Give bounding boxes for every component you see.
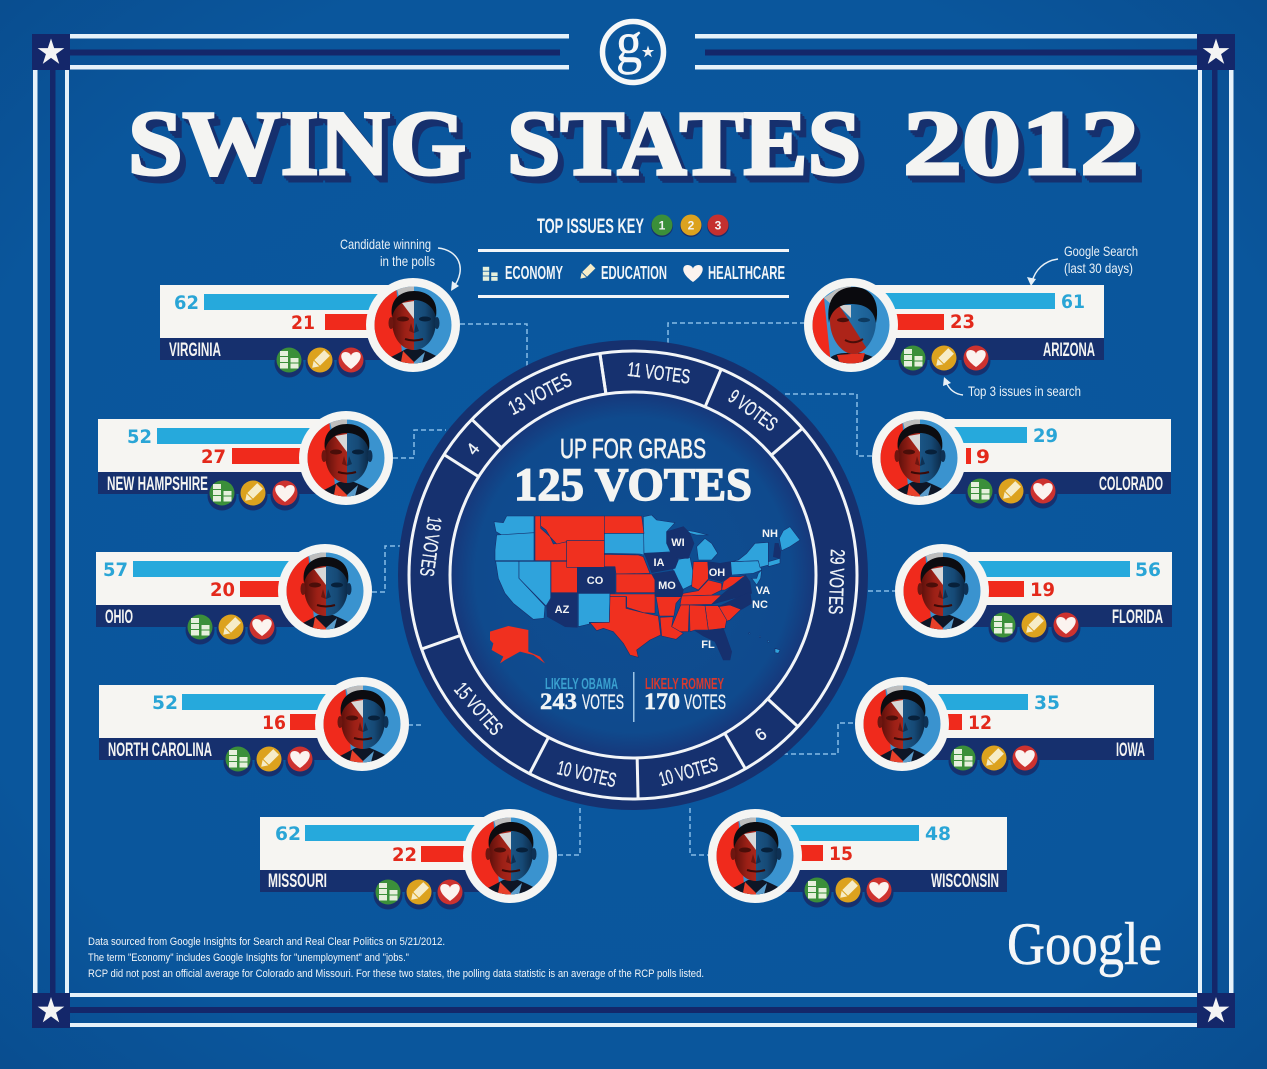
panel: North Carolina — [99, 677, 409, 776]
panel: Arizona — [804, 278, 1104, 376]
issue icons — [186, 614, 276, 644]
poll number: 19 — [1030, 579, 1055, 601]
title: STATES — [507, 92, 861, 194]
annotation: top 3 issues in search: Top 3 issues in search — [968, 383, 1081, 399]
key rank 3 — [707, 214, 729, 237]
segment Wisconsin 10 votes: 10 VOTES — [657, 754, 720, 791]
segment North Carolina 15 votes: 15 VOTES — [449, 679, 507, 740]
state name: IOWA — [1116, 740, 1145, 761]
poll number: 27 — [201, 446, 226, 468]
state name: NORTH CAROLINA — [108, 740, 212, 761]
segment Florida 29 votes: 29 VOTES — [824, 549, 848, 615]
portrait — [872, 411, 966, 505]
portrait — [315, 677, 409, 771]
state name: OHIO — [105, 607, 133, 628]
search number: 29 — [1033, 425, 1058, 447]
key rank 2: 2 — [688, 218, 695, 232]
search bar — [950, 561, 1130, 577]
search number: 52 — [127, 426, 152, 448]
key rank 1: 1 — [659, 218, 666, 232]
likely Romney votes — [644, 689, 726, 714]
search bar — [204, 294, 394, 310]
footnotes — [88, 936, 704, 980]
search number: 48 — [925, 823, 951, 845]
icon: Google g star badge — [602, 10, 664, 82]
issue icons — [966, 478, 1058, 508]
search bar — [182, 694, 347, 710]
portrait — [278, 544, 372, 638]
portrait — [463, 809, 557, 903]
panel: New Hampshire — [98, 411, 393, 510]
poll bar — [966, 448, 971, 464]
US electoral map: IA — [654, 557, 665, 569]
annotation: top 3 issues in search — [943, 377, 1081, 399]
panel: Virginia — [160, 278, 460, 378]
state name: MISSOURI — [268, 871, 327, 892]
segment Missouri 10 votes: 10 VOTES — [555, 757, 618, 792]
poll number: 15 — [829, 843, 853, 865]
search number: 62 — [174, 292, 199, 314]
US electoral map: FL — [701, 639, 715, 651]
corner star bottom right — [1197, 993, 1235, 1028]
portrait — [855, 677, 949, 771]
search number: 35 — [1034, 692, 1060, 714]
US electoral map: NC — [752, 599, 768, 611]
Google wordmark: Google — [1007, 911, 1162, 977]
US electoral map: NH — [762, 528, 778, 540]
portrait — [708, 809, 802, 903]
state name: COLORADO — [1099, 474, 1163, 495]
search bar — [910, 694, 1028, 710]
segment Virginia 13 votes: 13 VOTES — [505, 369, 575, 420]
issue icons — [948, 746, 1040, 776]
top issues key — [478, 214, 789, 298]
issue icons — [988, 612, 1080, 642]
map legend — [540, 672, 726, 722]
panel: Ohio — [96, 544, 372, 644]
key education: EDUCATION — [601, 263, 667, 283]
search number: 61 — [1061, 291, 1085, 313]
key economy — [483, 263, 563, 283]
portrait — [299, 411, 393, 505]
US electoral map: VA — [756, 585, 770, 597]
key heading: TOP ISSUES KEY — [537, 215, 644, 238]
annotation: candidate winning in the polls: in the polls — [380, 253, 435, 269]
annotation: google search last 30 days — [1027, 243, 1138, 286]
poll number: 9 — [976, 446, 990, 468]
panel: Wisconsin — [708, 809, 1007, 908]
portrait — [804, 278, 898, 372]
US electoral map: MO — [658, 580, 676, 592]
portrait — [366, 278, 460, 372]
issue icons — [208, 480, 300, 510]
key rank 2 — [680, 214, 702, 237]
poll number: 16 — [262, 712, 286, 734]
likely Romney label: LIKELY ROMNEY — [645, 676, 724, 693]
icon: Google g star badge: g — [616, 10, 642, 75]
poll number: 23 — [950, 311, 975, 333]
poll number: 20 — [210, 579, 235, 601]
key healthcare — [683, 263, 785, 283]
state name: ARIZONA — [1043, 340, 1095, 361]
key healthcare: HEALTHCARE — [708, 263, 785, 283]
central votes wheel — [398, 340, 868, 810]
panel: Colorado — [872, 411, 1171, 508]
state name: FLORIDA — [1112, 607, 1163, 628]
likely Obama votes — [540, 689, 624, 714]
title: 2012 — [903, 92, 1139, 194]
annotation: candidate winning in the polls: Candidate winning — [340, 236, 431, 252]
US electoral map: AZ — [555, 604, 570, 616]
segment Arizona 11 votes: 11 VOTES — [626, 359, 691, 389]
issue icons — [274, 348, 366, 378]
annotation: candidate winning in the polls — [340, 236, 460, 291]
state name: VIRGINIA — [169, 340, 221, 361]
poll bar — [920, 714, 962, 730]
state name: NEW HAMPSHIRE — [107, 474, 208, 495]
issue icons — [374, 880, 464, 910]
footnotes: Data sourced from Google Insights for Search and Real Clear Politics on 5/21/2012. — [88, 936, 445, 948]
issue icons — [802, 878, 894, 908]
poll number: 12 — [968, 712, 992, 734]
search number: 62 — [275, 823, 301, 845]
likely Romney votes: 170 — [644, 689, 680, 714]
search bar — [930, 427, 1027, 443]
poll number: 22 — [392, 844, 417, 866]
panel: Florida — [895, 544, 1172, 642]
dashed connectors — [372, 323, 895, 855]
corner star top right — [1197, 34, 1235, 70]
poll bar — [325, 314, 385, 330]
search number: 56 — [1135, 559, 1161, 581]
US electoral map: OH — [709, 567, 725, 579]
poll bar — [880, 314, 944, 330]
corner star top left — [32, 34, 70, 70]
poll bar — [232, 448, 322, 464]
segment Colorado 9 votes: 9 VOTES — [724, 386, 781, 436]
poll number: 21 — [291, 312, 315, 334]
poll bar — [775, 845, 823, 861]
likely Obama votes: VOTES — [582, 691, 624, 714]
panel: Missouri — [260, 809, 557, 910]
footnotes: The term "Economy" includes Google Insights for "unemployment" and "jobs." — [88, 952, 409, 964]
search number: 57 — [103, 559, 128, 581]
title — [128, 92, 1139, 194]
key rank 3: 3 — [715, 218, 722, 232]
footnotes: RCP did not post an official average for Colorado and Missouri. For these two states, the polling data statistic is an average of the RCP polls listed. — [88, 968, 704, 980]
search number: 52 — [152, 692, 178, 714]
issue icons — [898, 346, 990, 376]
likely Obama label: LIKELY OBAMA — [545, 676, 618, 693]
poll bar — [290, 714, 340, 730]
US electoral map: CO — [587, 575, 604, 587]
title: SWING — [128, 92, 466, 194]
search bar — [305, 825, 495, 841]
annotation: google search last 30 days: (last 30 days) — [1064, 260, 1133, 276]
poll bar — [421, 846, 481, 862]
panel: Iowa — [855, 677, 1154, 776]
segment Iowa 6: 6 — [751, 724, 770, 745]
likely Romney votes: VOTES — [684, 691, 726, 714]
key rank 1 — [651, 214, 673, 237]
state name: WISCONSIN — [931, 871, 999, 892]
heading: up for grabs: UP FOR GRABS — [560, 433, 706, 464]
search bar — [765, 825, 919, 841]
poll bar — [960, 581, 1024, 597]
key education — [578, 263, 667, 283]
key economy: ECONOMY — [505, 263, 563, 283]
search bar — [157, 428, 327, 444]
search bar — [870, 293, 1055, 309]
heading: 125 votes: 125 VOTES — [514, 459, 752, 511]
segment New Hampshire 4: 4 — [463, 440, 483, 459]
annotation: google search last 30 days: Google Search — [1064, 243, 1138, 259]
search bar — [133, 561, 303, 577]
segment Ohio 18 votes: 18 VOTES — [415, 515, 445, 578]
portrait — [895, 544, 989, 638]
US electoral map — [490, 515, 800, 663]
poll bar — [240, 581, 300, 597]
US electoral map: WI — [671, 537, 685, 549]
likely Obama votes: 243 — [540, 689, 577, 714]
issue icons — [224, 746, 314, 776]
corner star bottom left — [32, 993, 70, 1028]
